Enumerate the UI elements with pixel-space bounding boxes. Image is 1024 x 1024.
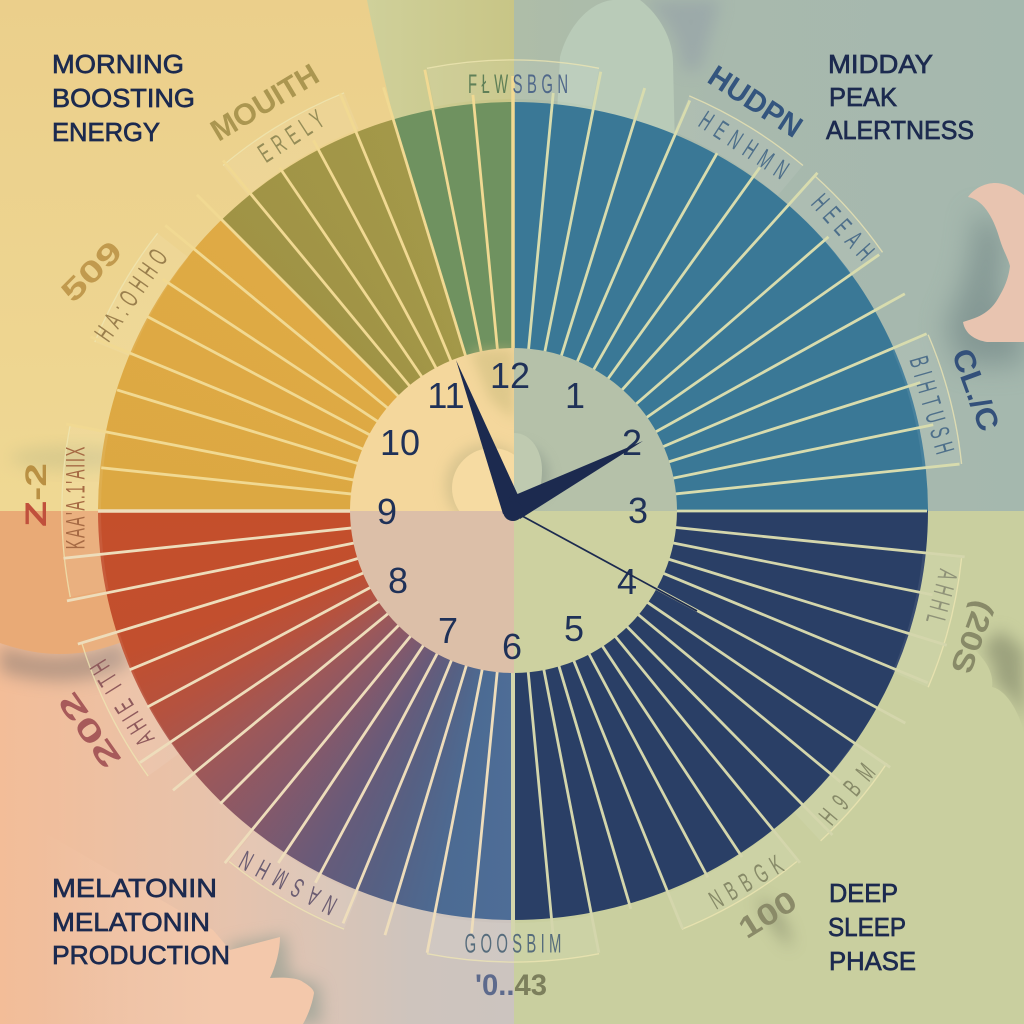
corner heading: deep sleep: SLEEP — [828, 912, 906, 942]
cloud: lower right — [920, 650, 1024, 800]
corner heading: melatonin: MELATONIN — [52, 907, 210, 937]
clock hands — [456, 360, 697, 611]
corner heading: melatonin: PRODUCTION — [52, 940, 230, 970]
numeral 7: 7 — [438, 610, 458, 651]
corner heading: midday: MIDDAY — [828, 49, 933, 79]
chart: 24 hour coloured ring — [98, 102, 928, 920]
band heading: (20S: (20S — [944, 596, 1000, 678]
quadrant: midday — [514, 0, 1024, 511]
numeral 5: 5 — [564, 608, 584, 649]
band label: GOOSBIM: GOOSBIM — [465, 928, 561, 958]
numeral 9: 9 — [377, 491, 397, 532]
band label: top: FŁWSBGN — [468, 68, 568, 98]
band label: NASMHN: NASMHN — [234, 845, 342, 921]
shadow: tail near 100 label — [757, 897, 791, 949]
shadow: top bubble — [640, 0, 720, 70]
band label: H9BM: H9BM — [813, 757, 881, 831]
quadrant: melatonin — [0, 511, 514, 1024]
numeral 1: 1 — [565, 375, 585, 416]
quadrant: morning — [0, 0, 514, 511]
band label: HENHMN: HENHMN — [694, 105, 794, 185]
band label: NBBGK: NBBGK — [704, 848, 789, 915]
quadrant: morning green strip — [367, 0, 514, 130]
band heading: MOUITH: MOUITH — [205, 58, 325, 148]
dial bump: midday — [514, 433, 542, 511]
band label: KAA'A.1'AIIX: KAA'A.1'AIIX — [60, 446, 90, 549]
band label: ERELY: ERELY — [252, 103, 330, 169]
band label: BIHTUSH: BIHTUSH — [903, 353, 961, 457]
label strip fills — [59, 57, 959, 965]
ticks: melatonin quadrant — [63, 511, 498, 953]
band label: HEEAH: HEEAH — [805, 188, 881, 266]
band heading: 0.43: '0..43 — [475, 968, 547, 1002]
clock face — [350, 348, 677, 673]
band heading: CL./C: CL./C — [945, 344, 1005, 436]
dial quadrant: midday — [514, 348, 677, 511]
shadow: lower right cloud — [982, 630, 1024, 725]
band heading: 202: 202 — [52, 686, 128, 774]
ticks: deep sleep quadrant — [513, 526, 965, 953]
shadow: dial bump left — [442, 441, 514, 511]
dial quadrant: deep sleep — [514, 511, 677, 673]
shadow: dial top strip — [470, 348, 514, 420]
shadow: right peach crescent — [945, 210, 1024, 365]
radial tick lines — [63, 70, 965, 953]
band heading: HUDPN: HUDPN — [702, 60, 808, 144]
corner heading: melatonin: MELATONIN — [52, 873, 217, 903]
band label: AHIE ITH: AHIE ITH — [84, 654, 160, 752]
minute hand — [456, 360, 523, 514]
shadow band on left edge — [10, 446, 130, 470]
cloud: left orange — [0, 511, 130, 654]
corner heading: midday: ALERTNESS — [826, 115, 974, 145]
band label: HA:OHHO: HA:OHHO — [88, 243, 174, 347]
corner heading: midday — [826, 49, 974, 145]
corner heading: deep sleep — [828, 878, 916, 976]
numeral 4: 4 — [617, 561, 637, 602]
second hand — [513, 511, 697, 611]
cloud: lower left peach — [40, 830, 314, 1024]
dial bump: morning — [452, 448, 514, 511]
numeral 12: 12 — [490, 355, 530, 396]
shadow: lower left cloud — [225, 935, 322, 1024]
ticks: morning quadrant — [66, 70, 513, 495]
hour hand — [508, 441, 643, 519]
numeral 11: 11 — [427, 375, 465, 416]
numeral 10: 10 — [380, 422, 420, 463]
corner heading: morning: ENERGY — [52, 117, 160, 147]
numeral 2: 2 — [622, 422, 642, 463]
numeral 8: 8 — [388, 560, 408, 601]
band heading: 100: 100 — [733, 885, 803, 945]
ticks: midday quadrant — [527, 72, 960, 511]
cloud: top bubble — [555, 0, 675, 150]
numeral 3: 3 — [628, 490, 648, 531]
shadow: left orange cloud — [0, 640, 130, 681]
corner heading: morning — [52, 49, 195, 147]
band heading: 509: 509 — [55, 235, 129, 309]
shadow: dial bump right — [538, 450, 551, 484]
corner heading: deep sleep: DEEP — [829, 878, 898, 908]
corner heading: deep sleep: PHASE — [829, 946, 916, 976]
clock numerals — [377, 355, 648, 667]
cloud: right peach crescent — [963, 183, 1024, 342]
corner heading: morning: BOOSTING — [52, 83, 195, 113]
dial quadrant: morning — [350, 348, 514, 511]
corner heading: morning: MORNING — [52, 49, 184, 79]
band heading: Z-2: Z-2 — [20, 463, 52, 527]
band label: AHHL: AHHL — [920, 566, 964, 628]
hub — [503, 501, 523, 521]
corner heading: melatonin — [52, 873, 230, 970]
numeral 6: 6 — [502, 626, 522, 667]
dial quadrant: melatonin — [350, 511, 514, 673]
quadrant: deep sleep — [514, 511, 1024, 1024]
corner heading: midday: PEAK — [829, 82, 898, 112]
